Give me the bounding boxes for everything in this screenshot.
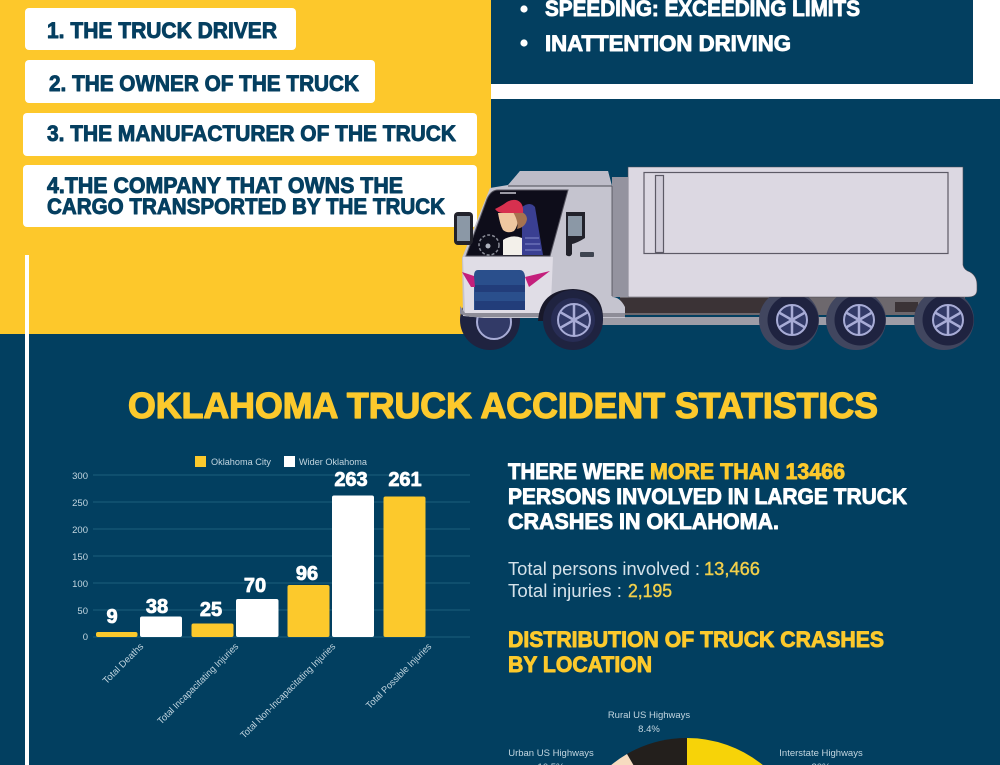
bar values	[106, 469, 422, 628]
cab body	[462, 171, 625, 318]
chart legend: Wider Oklahoma	[299, 457, 368, 468]
y axis labels: 150	[72, 552, 88, 563]
illustration: truck	[454, 167, 977, 350]
heading: distribution: DISTRIBUTION OF TRUCK CRASHES	[508, 627, 884, 652]
bar values: 70	[244, 575, 266, 597]
text block: persons involved: MORE THAN 13466	[650, 459, 845, 484]
y axis labels: 250	[72, 498, 88, 509]
list item 4: CARGO TRANSPORTED BY THE TRUCK	[47, 194, 445, 219]
rear wheels	[759, 290, 974, 350]
text block: persons involved: PERSONS INVOLVED IN LARGE TRUCK	[508, 484, 907, 509]
rear-left cab wheel hub	[477, 305, 511, 339]
text block: persons involved	[508, 459, 907, 534]
vertical timeline line	[25, 255, 29, 765]
x axis labels: Total Possible Injuries	[364, 641, 434, 711]
x axis labels: Total Non-Incapacitating Injuries	[238, 641, 338, 741]
list item 4: 4.THE COMPANY THAT OWNS THE	[47, 173, 403, 198]
side mirrors	[454, 212, 585, 256]
chart legend	[195, 456, 368, 468]
list item 2: 2. THE OWNER OF THE TRUCK	[49, 71, 359, 96]
text block: persons involved: THERE WERE	[508, 459, 644, 484]
y axis labels: 0	[83, 632, 88, 643]
list item 2	[25, 60, 375, 103]
grille	[474, 270, 525, 310]
list item 3	[23, 113, 477, 156]
bar values: 96	[296, 563, 318, 585]
y axis labels: 100	[72, 579, 88, 590]
heading: distribution	[508, 627, 884, 677]
pie labels: Urban US Highways	[508, 748, 594, 759]
driver	[479, 200, 543, 255]
x axis labels	[101, 641, 434, 741]
list item 3: 3. THE MANUFACTURER OF THE TRUCK	[47, 121, 456, 146]
windshield	[466, 190, 568, 256]
list item 1	[25, 8, 296, 50]
bar values: 261	[388, 469, 422, 491]
trailer	[628, 167, 977, 297]
door handle	[580, 252, 594, 257]
text block: totals: Total injuries :	[508, 581, 622, 601]
pie chart	[508, 710, 863, 765]
text block: totals: 2,195	[628, 581, 672, 601]
y axis labels: 200	[72, 525, 88, 536]
y axis labels: 300	[72, 471, 88, 482]
pie labels	[508, 710, 863, 765]
x axis labels: Total Deaths	[101, 641, 146, 687]
pie labels: 8.4%	[638, 724, 660, 735]
trailer connector	[612, 177, 628, 297]
panel: causes of accidents: INATTENTION DRIVING	[545, 31, 791, 56]
list item 1: 1. THE TRUCK DRIVER	[47, 18, 277, 43]
bar values: 38	[146, 596, 168, 618]
wheels behind body	[460, 290, 520, 350]
list item 4	[23, 165, 477, 227]
text block: totals	[508, 559, 760, 601]
pie labels: Interstate Highways	[779, 748, 863, 759]
headlights	[462, 271, 550, 287]
heading: distribution: BY LOCATION	[508, 652, 652, 677]
bars	[96, 496, 426, 637]
bar values: 9	[106, 606, 118, 628]
panel: causes of accidents	[491, 0, 1000, 99]
pie labels: Rural US Highways	[608, 710, 690, 721]
text block: totals: Total persons involved :	[508, 559, 700, 579]
bar values: 263	[334, 469, 368, 491]
text block: persons involved: CRASHES IN OKLAHOMA.	[508, 509, 779, 534]
y axis labels	[72, 471, 88, 643]
bar chart	[72, 456, 470, 741]
bar values: 25	[200, 599, 222, 621]
text block: totals: 13,466	[704, 559, 760, 579]
front wheel	[538, 289, 603, 350]
chassis	[620, 296, 965, 315]
panel: parties liable	[0, 0, 491, 334]
title: OKLAHOMA TRUCK ACCIDENT STATISTICS	[128, 385, 878, 426]
y axis labels: 50	[77, 606, 88, 617]
x axis labels: Total Incapacitating Injuries	[156, 641, 241, 727]
chart legend: Oklahoma City	[211, 457, 271, 468]
